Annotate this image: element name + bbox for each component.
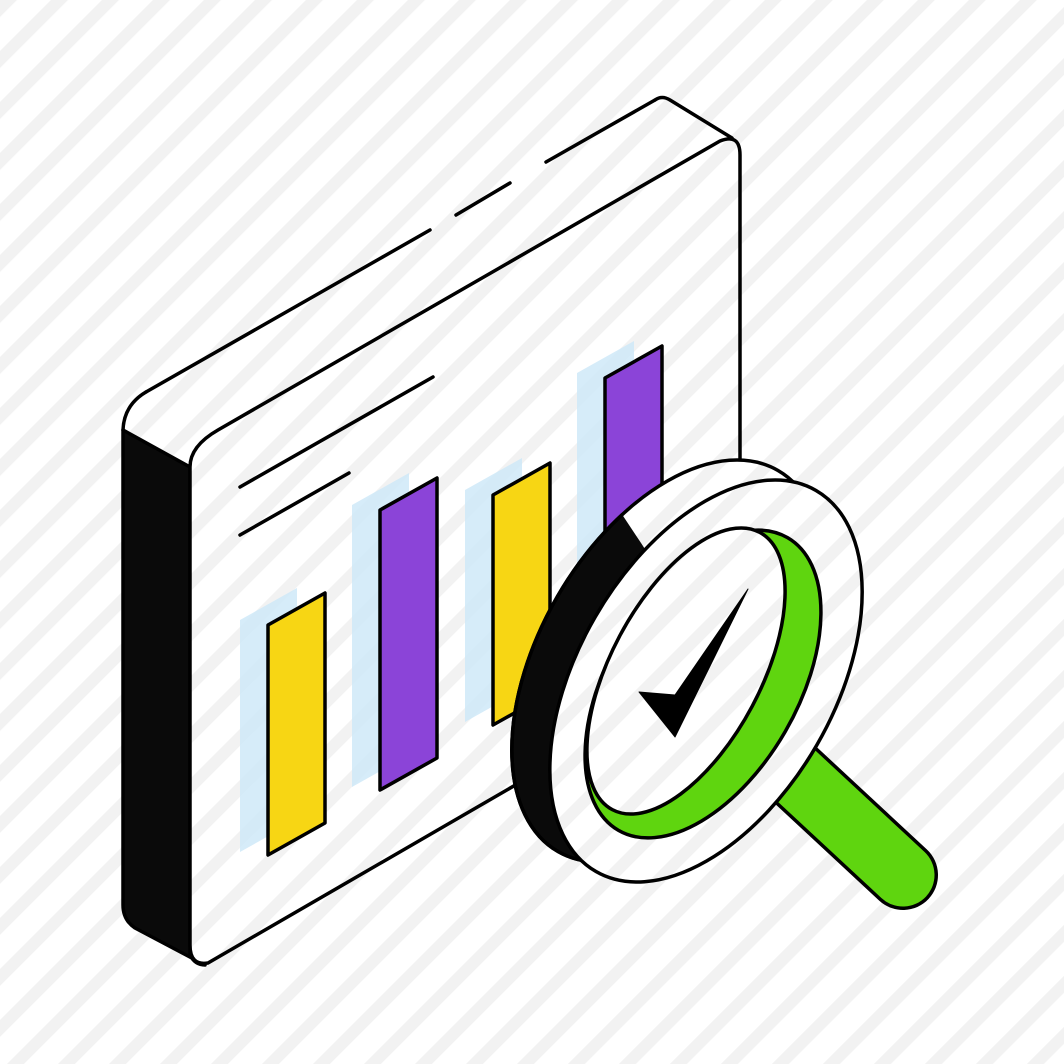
- bar shadows: [240, 341, 634, 852]
- board: back edge and black side: [123, 98, 732, 965]
- bar chart: [268, 346, 662, 855]
- text lines on board: [240, 377, 433, 535]
- magnifier handle: [790, 770, 903, 875]
- magnifier: lens with green inner wall: [583, 526, 823, 840]
- icon: checkmark: [639, 589, 748, 737]
- magnifier: front ring: [548, 478, 864, 884]
- magnifier: back ring: [510, 458, 794, 862]
- board: front face: [190, 139, 740, 963]
